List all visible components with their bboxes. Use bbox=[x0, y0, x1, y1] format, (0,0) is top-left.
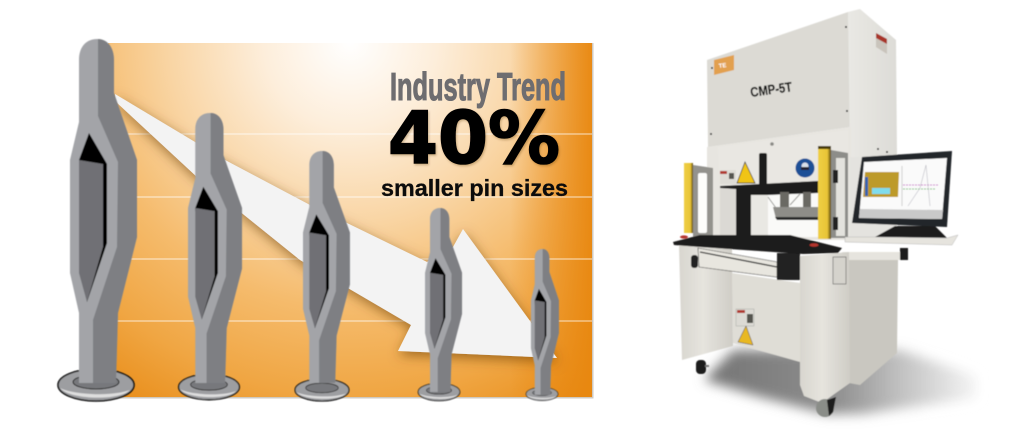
screen: chart traces bbox=[902, 165, 938, 206]
screen: blue sidebar bbox=[865, 177, 868, 196]
label: CMP-5T: CMP-5T bbox=[749, 79, 794, 100]
left light curtain bbox=[684, 163, 713, 238]
monitor shelf bbox=[845, 235, 958, 245]
icon: yellow warning triangle bbox=[737, 162, 755, 183]
left caster bbox=[696, 360, 709, 374]
work table top bbox=[673, 235, 842, 254]
front caster bbox=[816, 397, 836, 417]
upper cabinet bbox=[707, 9, 897, 240]
icon: electrical hazard triangle bbox=[738, 326, 753, 345]
monitor bbox=[852, 151, 952, 227]
side bracket bbox=[833, 257, 846, 284]
pin 2 bbox=[179, 113, 242, 400]
monitor stand bbox=[875, 226, 947, 238]
logo: TE: TE bbox=[718, 63, 727, 70]
pin 4 bbox=[418, 208, 462, 401]
screen: board image bbox=[863, 172, 899, 197]
screen: cyan panel bbox=[872, 188, 890, 194]
front pillar bbox=[800, 252, 850, 403]
warning label: top right bbox=[876, 33, 887, 54]
machine: CMP-5T press bbox=[673, 9, 976, 417]
panel: orange trend chart background bbox=[108, 43, 594, 398]
heading: Industry Trend: Industry Trend bbox=[390, 66, 566, 109]
drawer bbox=[691, 248, 800, 280]
monitor screen bbox=[859, 158, 947, 219]
right light curtain bbox=[818, 146, 848, 239]
floor shadow bbox=[704, 350, 976, 414]
machine side panel bbox=[849, 252, 898, 385]
pin 5: smallest bbox=[526, 249, 559, 401]
pin 3 bbox=[295, 151, 350, 401]
lower back panel bbox=[732, 273, 800, 362]
logo: TE bbox=[714, 55, 734, 75]
arrow: downward trend bbox=[115, 94, 557, 358]
statistic: 40%: 40% bbox=[388, 96, 560, 180]
emergency stop buttons bbox=[680, 235, 818, 247]
lower left leg bbox=[679, 245, 733, 360]
icon: blue safety circle bbox=[796, 158, 814, 178]
press opening bbox=[720, 153, 818, 238]
shelf bracket bbox=[842, 248, 908, 260]
pin 1: largest bbox=[58, 39, 137, 401]
lower warning label bbox=[736, 309, 754, 326]
screen: toolbar bbox=[859, 209, 943, 219]
caption: smaller pin sizes: smaller pin sizes bbox=[381, 175, 568, 201]
safety label bbox=[720, 170, 736, 184]
